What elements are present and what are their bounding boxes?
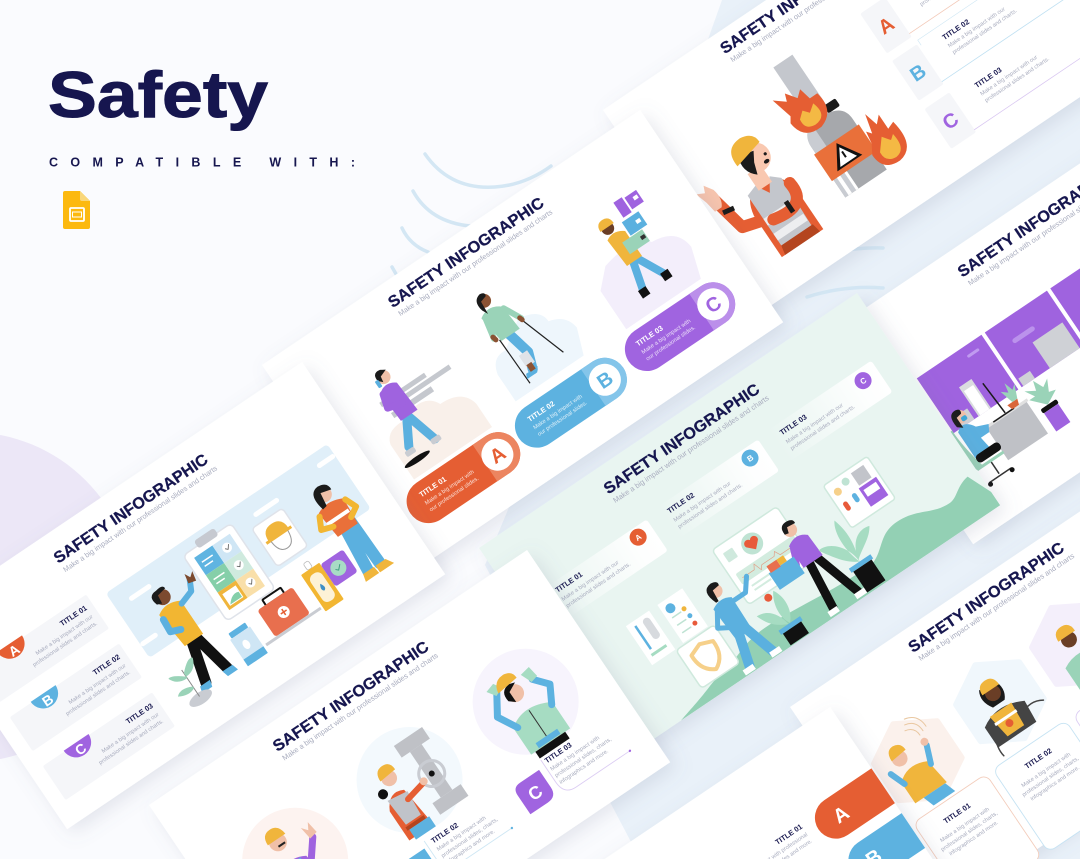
circle backgrounds bbox=[242, 649, 578, 859]
card A: TITLE 01 bbox=[554, 570, 584, 594]
background blobs bbox=[372, 216, 713, 480]
illustration: worker waving bbox=[256, 809, 351, 859]
option C: Make a big impact with our bbox=[980, 55, 1039, 97]
checklist card bbox=[657, 588, 708, 643]
option C bbox=[924, 1, 1080, 149]
card B: TITLE 02 bbox=[91, 652, 122, 677]
illustration: worker carrying boxes bbox=[589, 188, 689, 299]
option B: TITLE 02 bbox=[940, 17, 971, 42]
pill B bbox=[506, 349, 635, 456]
pill C: our professional slides. bbox=[645, 325, 697, 362]
illustration: woman in vest bbox=[300, 475, 394, 586]
illustration: female worker with wires bbox=[963, 659, 1057, 756]
heart monitor card bbox=[712, 506, 814, 605]
card C: TITLE 03 bbox=[778, 412, 808, 437]
pill A bbox=[398, 424, 529, 532]
text block 2: professional slides, charts, bbox=[440, 817, 500, 859]
card 2: TITLE 02 bbox=[1023, 746, 1054, 771]
option B: professional slides and charts. bbox=[952, 8, 1019, 56]
window panels with skyline bbox=[917, 245, 1080, 433]
illustration: worried worker bbox=[684, 128, 823, 277]
card A: Make a big impact with our bbox=[561, 560, 620, 603]
card A: professional slides and charts. bbox=[565, 561, 632, 609]
card B: B bbox=[39, 691, 56, 710]
text block 3 bbox=[540, 714, 632, 796]
pill C: C bbox=[702, 292, 726, 318]
main title: Safety bbox=[48, 58, 268, 131]
card 2 bbox=[993, 720, 1080, 852]
badge C bbox=[513, 770, 557, 814]
heading: SAFETY INFOGRAPHIC bbox=[906, 539, 1068, 656]
pill A: Make a big impact with bbox=[424, 469, 475, 507]
illustration: worker on crutches bbox=[469, 274, 567, 386]
subtitle: Make a big impact with our professional slides and charts bbox=[396, 207, 554, 318]
card B: B bbox=[745, 453, 755, 464]
card 1: professional slides, charts, bbox=[940, 810, 999, 853]
heading: SAFETY INFOGRAPHIC bbox=[51, 451, 212, 567]
slide: green health panel (center) bbox=[479, 293, 1000, 760]
pill B: TITLE 02 bbox=[526, 399, 556, 424]
option A bbox=[860, 0, 1047, 54]
card B: professional slides and charts. bbox=[65, 669, 132, 717]
card A bbox=[543, 519, 668, 621]
card C bbox=[768, 361, 893, 462]
card A bbox=[0, 593, 109, 702]
icon: google slides bbox=[63, 191, 90, 229]
illustration: plant bbox=[164, 657, 217, 713]
option A: A bbox=[874, 13, 899, 39]
plant left with pot bbox=[749, 585, 811, 652]
slide: pills (bottom) bbox=[631, 714, 941, 859]
badge B bbox=[398, 848, 442, 859]
card C: professional slides and charts. bbox=[790, 404, 857, 452]
pill B: B bbox=[593, 367, 618, 394]
card B bbox=[658, 439, 779, 539]
text block 2 bbox=[424, 796, 514, 859]
badge C: C bbox=[524, 781, 546, 805]
card B: professional slides and charts. bbox=[677, 482, 744, 530]
illustration: worker on radio bbox=[870, 711, 965, 816]
icon: yellow spray bbox=[297, 556, 344, 611]
helmet card bbox=[252, 508, 308, 567]
card 2: professional slides, charts, bbox=[1021, 756, 1080, 798]
pill A bbox=[814, 768, 895, 839]
pill A: A bbox=[829, 802, 854, 828]
icon: flame left bbox=[773, 77, 835, 141]
card A: A bbox=[634, 532, 644, 543]
card B: Make a big impact with our bbox=[673, 481, 732, 524]
card 1: infographics and more. bbox=[948, 820, 1000, 857]
pill B: Make a big impact with bbox=[532, 394, 584, 431]
card A: TITLE 01 bbox=[58, 603, 89, 628]
slide: hexagons (bottom right) bbox=[790, 394, 1080, 859]
option B bbox=[890, 0, 1079, 101]
sky panel bbox=[106, 444, 371, 658]
background lilac circle bbox=[0, 432, 134, 762]
illustration: potted plant bbox=[1021, 373, 1075, 434]
illustration: man with folder bbox=[750, 506, 867, 632]
icon: purple shield tile bbox=[320, 549, 358, 587]
pill C: Make a big impact with bbox=[641, 318, 692, 356]
shield card bbox=[676, 625, 740, 689]
card C: C bbox=[72, 740, 89, 758]
card B: Make a big impact with our bbox=[68, 663, 127, 706]
card A: professional slides and charts. bbox=[32, 621, 99, 669]
text A bbox=[724, 822, 814, 859]
compatible with label: COMPATIBLE WITH: bbox=[49, 156, 355, 170]
slide: safety checklist (left) bbox=[0, 362, 445, 829]
pill A: A bbox=[486, 442, 510, 469]
plant right with pot bbox=[810, 506, 900, 602]
slide: fire extinguisher (top right) bbox=[603, 0, 1080, 322]
option B: Make a big impact with our bbox=[947, 6, 1007, 49]
subtitle: Make a big impact with our professional slides and charts bbox=[280, 651, 440, 762]
pill C: TITLE 03 bbox=[634, 324, 665, 348]
card C: C bbox=[858, 376, 868, 386]
text block 2: Make a big impact with bbox=[436, 815, 487, 853]
pill B bbox=[848, 813, 925, 859]
slide: injury cases with pills bbox=[262, 110, 783, 577]
hexagon backgrounds bbox=[857, 587, 1080, 818]
card B: TITLE 02 bbox=[665, 491, 696, 515]
illustration: worker with pipes on phone bbox=[352, 336, 484, 470]
card C: Make a big impact with our bbox=[101, 712, 160, 755]
option B: B bbox=[906, 60, 931, 87]
text A: TITLE 01 bbox=[774, 822, 804, 847]
text block 3: professional slides, charts, bbox=[554, 737, 613, 779]
slide: office (right) bbox=[830, 77, 1080, 544]
card 2: infographics and more. bbox=[1030, 765, 1080, 802]
option C: C bbox=[939, 108, 963, 135]
illustration: worker adjusting helmet bbox=[480, 656, 581, 765]
meds card bbox=[823, 456, 896, 528]
card A: Make a big impact with our bbox=[35, 614, 94, 657]
heading: SAFETY INFOGRAPHIC bbox=[385, 194, 548, 312]
clipboard checklist bbox=[180, 518, 275, 621]
subtitle: Make a big impact with our professional slides and charts bbox=[611, 393, 771, 505]
pill C bbox=[616, 274, 744, 380]
background blue shape bbox=[485, 0, 1080, 859]
text block 3: Make a big impact with bbox=[550, 735, 601, 773]
card C: TITLE 03 bbox=[124, 701, 155, 726]
card A: A bbox=[5, 641, 23, 660]
icon: flame right bbox=[851, 103, 914, 172]
background swirl lines bbox=[392, 154, 883, 297]
heading: SAFETY INFOGRAPHIC bbox=[601, 381, 763, 498]
subtitle: Make a big impact with our professional slides and charts bbox=[61, 464, 219, 574]
illustration: third worker bbox=[1045, 615, 1080, 695]
illustration: woman pointing bbox=[692, 565, 792, 676]
card C: professional slides and charts. bbox=[98, 718, 165, 766]
syringe card bbox=[626, 611, 675, 665]
option C: professional slides and charts. bbox=[984, 56, 1051, 104]
option C: TITLE 03 bbox=[973, 65, 1003, 90]
hills bbox=[681, 476, 1000, 720]
illustration: desk worker bbox=[933, 368, 1057, 492]
text block 2: TITLE 02 bbox=[429, 821, 460, 845]
shelf bbox=[265, 607, 322, 646]
card 2: Make a big impact with bbox=[1021, 752, 1072, 789]
icon: medicine jar bbox=[227, 621, 268, 666]
card 3 bbox=[1073, 666, 1080, 798]
pill B: our professional slides. bbox=[537, 400, 589, 438]
text block 3: TITLE 03 bbox=[543, 740, 573, 765]
card C: Make a big impact with our bbox=[785, 403, 845, 445]
illustration: extinguisher bbox=[761, 46, 888, 199]
card 1: TITLE 01 bbox=[942, 801, 972, 826]
card C bbox=[42, 691, 175, 800]
icon: first aid case bbox=[254, 582, 310, 637]
card 1: Make a big impact with bbox=[939, 807, 991, 844]
pill A: our professional slides. bbox=[429, 476, 481, 513]
heading: SAFETY INFOGRAPHIC bbox=[270, 638, 433, 755]
card 1 bbox=[913, 774, 1042, 859]
card B bbox=[9, 643, 142, 751]
illustration: valve and worker bbox=[360, 727, 472, 844]
subtitle: Make a big impact with our professional slides and charts bbox=[917, 551, 1076, 663]
slide: circles (bottom center) bbox=[149, 550, 670, 859]
pill A: TITLE 01 bbox=[417, 475, 448, 499]
illustration: man pointing bbox=[140, 567, 252, 693]
text block 3: infographics and more. bbox=[559, 748, 610, 786]
